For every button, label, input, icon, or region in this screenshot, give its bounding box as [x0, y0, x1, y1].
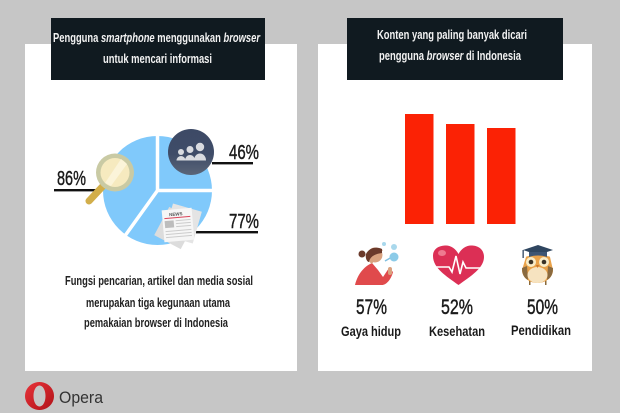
stat: pendidikan: Pendidikan [511, 322, 571, 338]
icon: people [168, 129, 214, 175]
callout: 77%: 77% [229, 210, 259, 233]
text block: summary: pemakaian browser di Indonesia [84, 316, 229, 330]
bar chart [405, 114, 516, 224]
icon: newspaper: NEWS [169, 211, 183, 217]
heading: right: Konten yang paling banyak dicari [377, 28, 527, 42]
panel: right [318, 18, 592, 371]
stat: kesehatan: 52% [441, 296, 473, 319]
heading: right: pengguna browser di Indonesia [379, 49, 522, 63]
text block: summary: Fungsi pencarian, artikel dan media sosial [65, 274, 253, 288]
icon: woman blowing bubbles [355, 242, 398, 285]
heading: right [347, 18, 563, 80]
callout: 86%: 86% [57, 167, 86, 190]
heading: left: Pengguna smartphone menggunakan browser [53, 31, 261, 45]
callout: 46% [212, 141, 259, 164]
text block: summary [65, 274, 253, 330]
stat: kesehatan: Kesehatan [429, 323, 485, 339]
callout: 46%: 46% [229, 141, 259, 164]
stat: pendidikan [511, 296, 571, 338]
logo: opera [25, 382, 104, 410]
pie chart [103, 130, 218, 245]
icon: heart [433, 246, 484, 285]
stat: kesehatan [429, 296, 485, 339]
stat: gaya hidup: Gaya hidup [341, 323, 401, 339]
heading: left [51, 18, 265, 80]
panel: left [25, 18, 297, 371]
stat: gaya hidup [341, 296, 401, 339]
stat: pendidikan: 50% [527, 296, 558, 319]
icon: owl [522, 245, 553, 285]
logo: opera: Opera [59, 388, 104, 407]
heading: left: untuk mencari informasi [103, 52, 212, 66]
text block: summary: merupakan tiga kegunaan utama [86, 296, 231, 310]
icon: magnifier [89, 154, 134, 201]
callout: 77% [196, 210, 259, 233]
stat: gaya hidup: 57% [356, 296, 387, 319]
icon: newspaper [154, 203, 202, 249]
